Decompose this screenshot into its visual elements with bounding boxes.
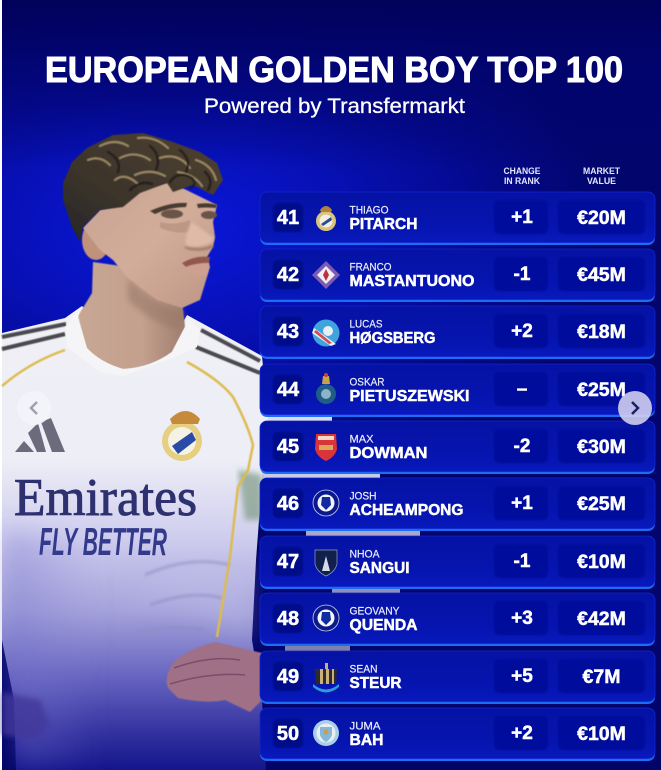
row 46: ACHEAMPONG bbox=[350, 502, 464, 519]
badge: Chelsea bbox=[313, 490, 339, 516]
badge: Chelsea bbox=[313, 605, 339, 631]
row 41: PITARCH bbox=[350, 216, 418, 233]
column header: market value: VALUE bbox=[587, 176, 616, 186]
left hand bbox=[2, 692, 50, 740]
row 44: OSKAR bbox=[350, 377, 385, 389]
hair bbox=[63, 133, 223, 242]
club crest on shirt bbox=[162, 411, 202, 461]
column header: market value: MARKET bbox=[583, 166, 620, 176]
row 43: +2 bbox=[511, 321, 533, 342]
sleeve slivers behind the rows bbox=[262, 416, 420, 652]
shoulder stripes bbox=[2, 324, 260, 373]
subtitle: Powered by Transfermarkt bbox=[204, 95, 465, 118]
row 50: 50 bbox=[277, 723, 299, 745]
sponsor: Emirates: Emirates bbox=[14, 469, 197, 527]
row 48 bbox=[260, 593, 655, 646]
mouth bbox=[182, 257, 210, 276]
row 48: +3 bbox=[511, 608, 533, 629]
row 50: +2 bbox=[511, 723, 533, 744]
row 47: SANGUI bbox=[350, 560, 410, 577]
title: EUROPEAN GOLDEN BOY TOP 100 bbox=[45, 49, 623, 90]
row 50 bbox=[260, 708, 655, 761]
badge: Newcastle bbox=[313, 663, 339, 692]
row 48: €42M bbox=[577, 608, 626, 630]
row 42 bbox=[260, 249, 655, 302]
row 45: €30M bbox=[577, 436, 626, 458]
collar bbox=[65, 308, 200, 376]
badge: Paris FC bbox=[315, 550, 337, 576]
row 47: -1 bbox=[514, 551, 531, 572]
row 49: €7M bbox=[583, 666, 620, 688]
hair curls bbox=[88, 138, 216, 190]
row 41: €20M bbox=[577, 207, 626, 229]
row 44: €25M bbox=[577, 379, 626, 401]
ear bbox=[82, 220, 110, 260]
badge: Strasbourg bbox=[312, 320, 340, 346]
row 43: €18M bbox=[577, 321, 626, 343]
row 50: JUMA bbox=[350, 721, 381, 733]
row 41: +1 bbox=[511, 207, 533, 228]
row 49: +5 bbox=[511, 666, 533, 687]
row 44: – bbox=[517, 379, 527, 400]
column header: change in rank: CHANGE bbox=[504, 166, 540, 176]
row 50: BAH bbox=[350, 732, 384, 749]
row 41 bbox=[260, 192, 655, 245]
previous arrow button bbox=[17, 391, 51, 425]
row 48: 48 bbox=[277, 608, 299, 630]
player photo bbox=[2, 133, 420, 770]
row 44 bbox=[260, 364, 655, 417]
row 45: MAX bbox=[350, 434, 374, 446]
row 45: -2 bbox=[514, 436, 530, 457]
nose bbox=[185, 222, 214, 249]
neck bbox=[78, 262, 185, 369]
row 41: 41 bbox=[277, 207, 299, 229]
next arrow button bbox=[618, 391, 652, 425]
row 43: LUCAS bbox=[350, 319, 382, 331]
gold piping bbox=[2, 350, 253, 637]
badge: Fiorentina bbox=[312, 261, 340, 289]
row 47: NHOA bbox=[350, 549, 380, 561]
row 46 bbox=[260, 478, 655, 531]
badge: Real Madrid bbox=[316, 206, 336, 231]
row 42: FRANCO bbox=[350, 262, 392, 274]
row 43 bbox=[260, 306, 655, 359]
badge: Arsenal bbox=[315, 434, 337, 461]
row 45: DOWMAN bbox=[350, 445, 428, 462]
row 42: €45M bbox=[577, 264, 626, 286]
adidas stripes bbox=[15, 418, 65, 452]
hand bbox=[167, 642, 262, 712]
row 45: 45 bbox=[277, 436, 299, 458]
column header: change in rank: IN RANK bbox=[504, 176, 540, 186]
row 47: €10M bbox=[577, 551, 626, 573]
sponsor: Fly Better: FLY BETTER bbox=[39, 521, 167, 564]
row 46: 46 bbox=[277, 493, 299, 515]
face bbox=[83, 182, 217, 308]
row 43: HØGSBERG bbox=[350, 330, 436, 347]
row 49: SEAN bbox=[350, 664, 378, 676]
eyes and brow bbox=[150, 203, 217, 232]
row 42: -1 bbox=[514, 264, 531, 285]
row 46: €25M bbox=[577, 493, 626, 515]
row 44: PIETUSZEWSKI bbox=[350, 388, 470, 405]
column header: market value bbox=[583, 166, 620, 186]
badge: Manchester City bbox=[313, 720, 339, 746]
row 41: THIAGO bbox=[350, 205, 389, 217]
row 48: GEOVANY bbox=[350, 606, 400, 618]
row 46: +1 bbox=[511, 493, 533, 514]
column header: change in rank bbox=[504, 166, 540, 186]
shirt folds bbox=[135, 562, 230, 632]
row 47: 47 bbox=[277, 551, 299, 573]
shirt bbox=[2, 306, 268, 770]
row 42: 42 bbox=[277, 264, 299, 286]
row 49: 49 bbox=[277, 666, 299, 688]
row 44: 44 bbox=[277, 379, 300, 401]
chin shadow bbox=[128, 278, 184, 330]
row 45 bbox=[260, 421, 655, 474]
row 46: JOSH bbox=[350, 491, 377, 503]
row 42: MASTANTUONO bbox=[350, 273, 474, 290]
row 48: QUENDA bbox=[350, 617, 418, 634]
row 49 bbox=[260, 651, 655, 704]
row 43: 43 bbox=[277, 321, 299, 343]
row 50: €10M bbox=[577, 723, 626, 745]
row 49: STEUR bbox=[350, 675, 402, 692]
badge: Porto bbox=[316, 373, 336, 404]
row 47 bbox=[260, 536, 655, 589]
